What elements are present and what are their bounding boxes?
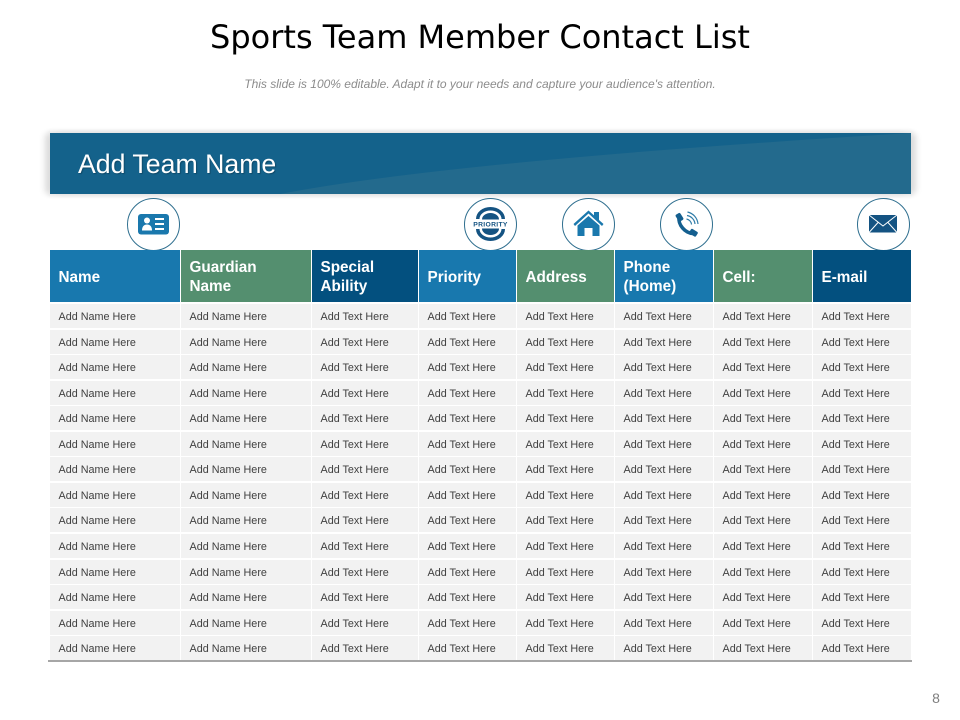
row 2: Add Name Here: [190, 337, 267, 349]
row 7: Add Name Here: [190, 464, 267, 476]
row 3: Add Text Here: [822, 362, 890, 374]
row 9: Add Name Here: [58, 515, 136, 527]
icon: house: [562, 198, 615, 250]
row 13: Add Name Here: [58, 618, 136, 630]
row 6: Add Text Here: [624, 439, 692, 451]
row 12: Add Text Here: [526, 592, 594, 604]
header: Priority: [419, 250, 516, 302]
header: Special Ability: Special: [320, 259, 374, 276]
row 6: Add Text Here: [320, 439, 389, 451]
row 9: Add Name Here: [190, 515, 267, 527]
row 11: Add Text Here: [624, 567, 692, 579]
row 8: Add Name Here: [58, 490, 136, 502]
row 7: Add Text Here: [722, 464, 791, 476]
header: Guardian Name: Name: [190, 278, 231, 295]
row 5: Add Text Here: [526, 413, 594, 425]
header: E-mail: E-mail: [822, 268, 867, 286]
row 1: Add Text Here: [320, 311, 389, 323]
row 9: Add Text Here: [428, 515, 496, 527]
row 1: Add Text Here: [428, 311, 496, 323]
row 5: Add Text Here: [624, 413, 692, 425]
row 10: Add Text Here: [722, 541, 791, 553]
row 4: Add Name Here: [190, 388, 267, 400]
row 5: Add Text Here: [320, 413, 389, 425]
row 13: Add Text Here: [624, 618, 692, 630]
row 11: Add Text Here: [722, 567, 791, 579]
row 14: Add Name Here: [58, 643, 136, 655]
row 14: [50, 636, 911, 660]
row 3: Add Text Here: [320, 362, 389, 374]
row 5: Add Text Here: [722, 413, 791, 425]
header: Phone (Home): (Home): [624, 278, 676, 295]
row 8: Add Text Here: [428, 490, 496, 502]
row 14: Add Text Here: [624, 643, 692, 655]
row 6: Add Text Here: [822, 439, 890, 451]
row 14: Add Text Here: [428, 643, 496, 655]
row 11: Add Text Here: [526, 567, 594, 579]
row 12: Add Text Here: [624, 592, 692, 604]
row 7: Add Name Here: [58, 464, 136, 476]
row 2: Add Text Here: [624, 337, 692, 349]
row 2: Add Text Here: [320, 337, 389, 349]
row 12: Add Text Here: [722, 592, 791, 604]
row 2: Add Text Here: [722, 337, 791, 349]
header: Address: Address: [526, 268, 587, 286]
row 9: Add Text Here: [822, 515, 890, 527]
row 10: Add Text Here: [526, 541, 594, 553]
row 11: Add Text Here: [428, 567, 496, 579]
row 12: [50, 585, 911, 609]
row 13: Add Text Here: [526, 618, 594, 630]
row 1: [50, 304, 911, 328]
row 4: Add Text Here: [320, 388, 389, 400]
row 14: Add Text Here: [320, 643, 389, 655]
row 11: [50, 560, 911, 584]
row 1: Add Text Here: [722, 311, 791, 323]
row 10: Add Text Here: [624, 541, 692, 553]
row 14: Add Text Here: [526, 643, 594, 655]
row 1: Add Text Here: [822, 311, 890, 323]
row 3: Add Name Here: [58, 362, 136, 374]
row 2: Add Text Here: [526, 337, 594, 349]
row 1: Add Name Here: [190, 311, 267, 323]
row 8: Add Text Here: [526, 490, 594, 502]
row 9: [50, 508, 911, 532]
row 6: Add Text Here: [526, 439, 594, 451]
row 12: Add Text Here: [822, 592, 890, 604]
header: Guardian Name: Guardian: [190, 259, 257, 276]
header: Address: [517, 250, 614, 302]
header: Special Ability: Ability: [320, 278, 367, 295]
row 7: Add Text Here: [822, 464, 890, 476]
row 1: Add Text Here: [526, 311, 594, 323]
row 13: Add Text Here: [822, 618, 890, 630]
row 2: Add Text Here: [822, 337, 890, 349]
row 5: Add Name Here: [58, 413, 136, 425]
row 8: Add Text Here: [722, 490, 791, 502]
row 2: [50, 330, 911, 354]
row 6: Add Text Here: [428, 439, 496, 451]
row 7: [50, 457, 911, 481]
header: Phone (Home): Phone: [624, 259, 670, 276]
row 4: Add Text Here: [526, 388, 594, 400]
row 5: Add Name Here: [190, 413, 267, 425]
row 13: Add Name Here: [190, 618, 267, 630]
row 4: Add Text Here: [722, 388, 791, 400]
row 14: Add Name Here: [190, 643, 267, 655]
row 4: Add Text Here: [428, 388, 496, 400]
row 8: Add Text Here: [320, 490, 389, 502]
header: Phone (Home): [615, 250, 713, 302]
row 3: Add Text Here: [526, 362, 594, 374]
row 6: Add Name Here: [58, 439, 136, 451]
header: Priority: Priority: [428, 268, 481, 286]
header: Special Ability: [312, 250, 418, 302]
row 11: Add Name Here: [58, 567, 136, 579]
subtitle: This slide is 100% editable. Adapt it to your needs and capture your audience's attention.: [244, 77, 716, 91]
row 13: Add Text Here: [428, 618, 496, 630]
row 8: [50, 483, 911, 507]
row 10: Add Text Here: [428, 541, 496, 553]
icon: phone: [660, 198, 713, 250]
row 3: Add Text Here: [722, 362, 791, 374]
row 8: Add Text Here: [822, 490, 890, 502]
row 7: Add Text Here: [624, 464, 692, 476]
row 3: Add Name Here: [190, 362, 267, 374]
row 4: Add Name Here: [58, 388, 136, 400]
row 9: Add Text Here: [722, 515, 791, 527]
row 8: Add Name Here: [190, 490, 267, 502]
row 13: Add Text Here: [722, 618, 791, 630]
row 6: [50, 432, 911, 456]
row 5: Add Text Here: [822, 413, 890, 425]
row 9: Add Text Here: [526, 515, 594, 527]
row 12: Add Text Here: [428, 592, 496, 604]
row 4: Add Text Here: [624, 388, 692, 400]
row 3: [50, 355, 911, 379]
header: Name: [50, 250, 180, 302]
row 10: Add Text Here: [822, 541, 890, 553]
row 11: Add Text Here: [320, 567, 389, 579]
header: E-mail: [813, 250, 911, 302]
row 9: Add Text Here: [320, 515, 389, 527]
row 5: [50, 406, 911, 430]
icon: id card: [127, 198, 180, 250]
row 10: Add Text Here: [320, 541, 389, 553]
page number: 8: [932, 690, 940, 706]
row 7: Add Text Here: [320, 464, 389, 476]
row 11: Add Name Here: [190, 567, 267, 579]
row 12: Add Name Here: [58, 592, 136, 604]
row 12: Add Name Here: [190, 592, 267, 604]
row 4: Add Text Here: [822, 388, 890, 400]
row 4: [50, 381, 911, 405]
row 14: Add Text Here: [822, 643, 890, 655]
row 3: Add Text Here: [624, 362, 692, 374]
row 10: Add Name Here: [190, 541, 267, 553]
row 13: [50, 611, 911, 635]
panel: team name banner: [50, 133, 911, 194]
row 5: Add Text Here: [428, 413, 496, 425]
row 6: Add Text Here: [722, 439, 791, 451]
header: Cell: [714, 250, 812, 302]
row 1: Add Text Here: [624, 311, 692, 323]
row 2: Add Name Here: [58, 337, 136, 349]
row 3: Add Text Here: [428, 362, 496, 374]
row 7: Add Text Here: [428, 464, 496, 476]
row 6: Add Name Here: [190, 439, 267, 451]
row 11: Add Text Here: [822, 567, 890, 579]
header: Guardian Name: [181, 250, 311, 302]
header: Cell: Cell:: [722, 268, 756, 286]
banner heading: Add Team Name: [78, 149, 276, 179]
icon: priority badge: [464, 198, 517, 250]
row 9: Add Text Here: [624, 515, 692, 527]
header: Name: Name: [58, 268, 100, 286]
row 10: [50, 534, 911, 558]
row 12: Add Text Here: [320, 592, 389, 604]
row 14: Add Text Here: [722, 643, 791, 655]
row 7: Add Text Here: [526, 464, 594, 476]
table: contact list: [48, 250, 912, 662]
row 1: Add Name Here: [58, 311, 136, 323]
row 8: Add Text Here: [624, 490, 692, 502]
icon: priority badge: PRIORITY: [473, 222, 507, 228]
icon: envelope: [857, 198, 910, 250]
title: Sports Team Member Contact List: [210, 18, 750, 56]
row 10: Add Name Here: [58, 541, 136, 553]
row 13: Add Text Here: [320, 618, 389, 630]
row 2: Add Text Here: [428, 337, 496, 349]
